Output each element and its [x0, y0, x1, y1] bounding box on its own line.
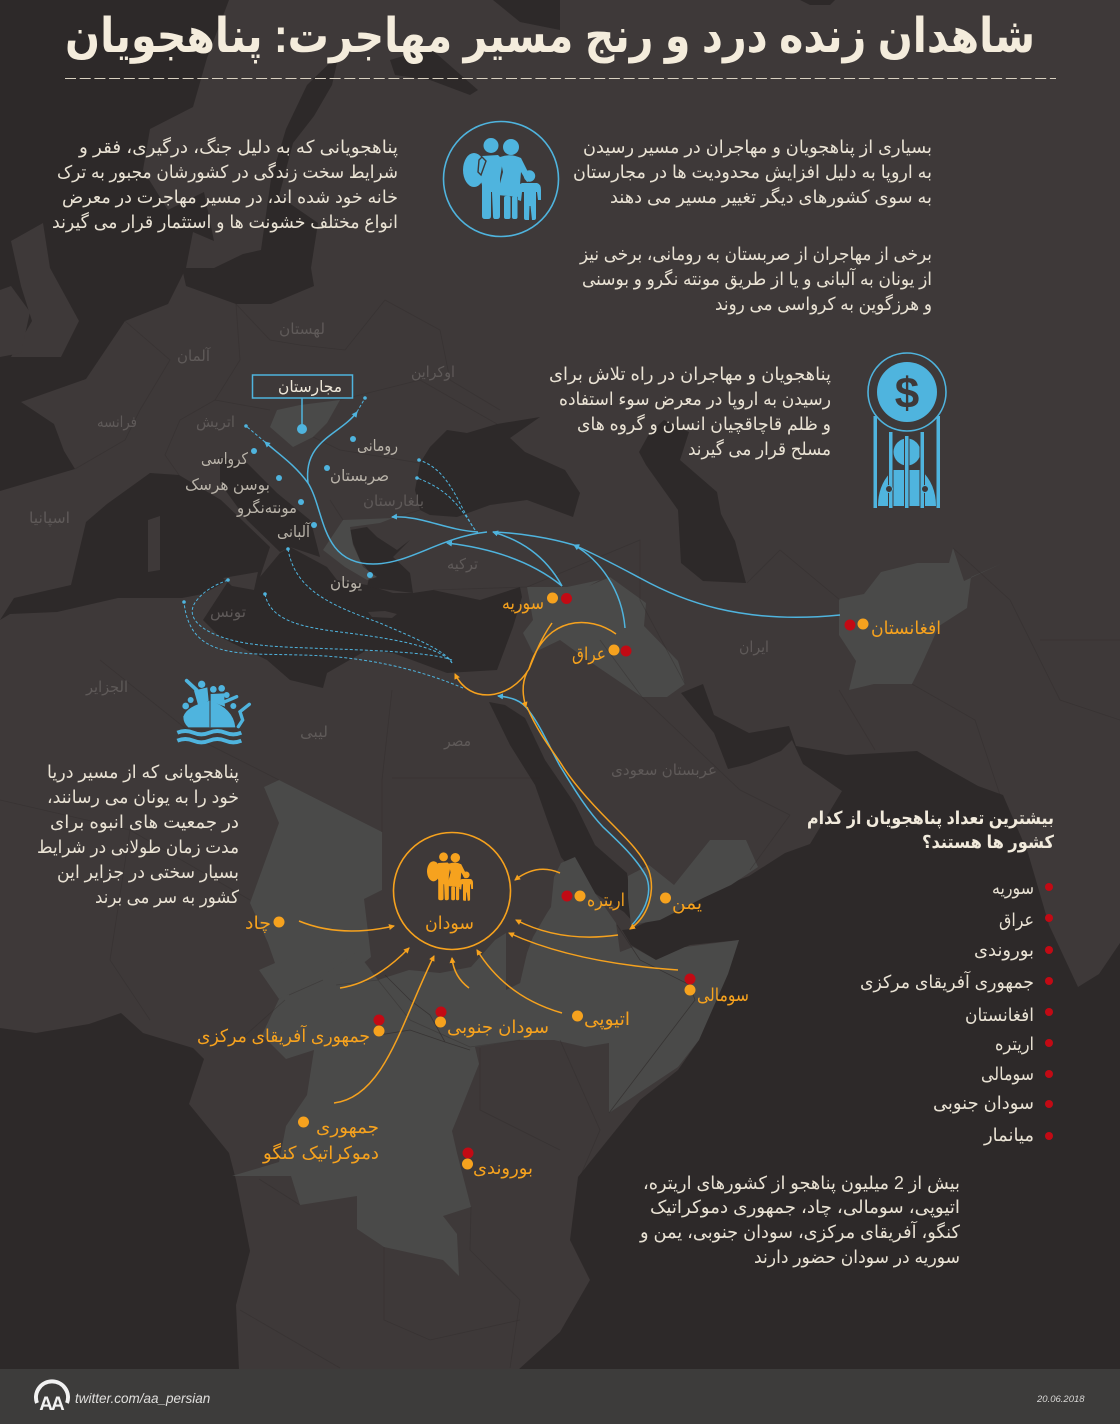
grey country labels: آلمان	[177, 347, 211, 365]
sudan circle with family icon	[394, 832, 510, 950]
text block: greek islands: در جمعیت های انبوه برای	[50, 812, 239, 833]
text block: route change: به سوی کشورهای دیگر تغییر مسیر می دهند	[610, 186, 932, 208]
text block: war and hardship: پناهجویانی که به دلیل جنگ، درگیری، فقر و	[78, 136, 398, 158]
grey country labels: اوکراین	[411, 364, 455, 381]
orange country labels: سومالی	[697, 985, 749, 1006]
date: 20.06.2018	[1036, 1394, 1085, 1405]
balkan route country labels: صربستان	[330, 468, 389, 486]
list: top origin countries: جمهوری آفریقای مرکزی	[860, 970, 1034, 993]
text block: refugees in sudan: کنگو، آفریقای مرکزی، سودان جنوبی، یمن و	[639, 1220, 960, 1243]
orange country labels: جمهوری آفریقای مرکزی	[197, 1024, 370, 1047]
orange country labels: چاد	[245, 913, 271, 933]
icon: money and prison bars: $	[895, 369, 919, 418]
orange country labels: عراق	[572, 644, 606, 665]
hungary callout: مجارستان	[278, 379, 342, 397]
list: top origin countries: میانمار	[983, 1125, 1034, 1145]
land islands	[0, 223, 397, 618]
balkan route country labels: آلبانی	[277, 522, 311, 541]
grey country labels: ایران	[739, 639, 769, 656]
list: top origin countries: سودان جنوبی	[933, 1093, 1034, 1114]
text block: refugees in sudan: اتیوپی، سومالی، چاد، جمهوری دموکراتیک	[650, 1197, 960, 1218]
text block: greek islands: پناهجویانی که از مسیر دریا	[47, 762, 239, 783]
text block: route change: بسیاری از پناهجویان و مهاجران در مسیر رسیدن	[583, 137, 932, 158]
balkan route country labels: مونته‌نگرو	[236, 498, 297, 518]
highlighted countries	[232, 400, 1003, 1276]
heading: top origin countries: کشور ها هستند؟	[922, 832, 1054, 853]
grey country labels: الجزایر	[85, 679, 128, 696]
orange country labels: بوروندی	[473, 1158, 533, 1179]
icon: migrant boat	[177, 681, 249, 742]
sudan dark strip	[506, 937, 527, 985]
blue solid routes	[265, 412, 840, 925]
grey country labels: مصر	[443, 733, 471, 750]
grey country labels: لیبی	[300, 724, 328, 741]
grey country labels: ترکیه	[447, 556, 478, 573]
text block: smugglers: پناهجویان و مهاجران در راه تلاش برای	[549, 364, 831, 385]
balkan route country labels: رومانی	[357, 438, 398, 456]
text block: refugees in sudan: بیش از 2 میلیون پناهجو از کشورهای اریتره،	[643, 1173, 960, 1194]
text block: war and hardship: شرایط سخت زندگی در کشورشان مجبور به ترک	[57, 161, 398, 183]
text block: smugglers	[549, 364, 831, 460]
list: top origin countries: افغانستان	[965, 1005, 1034, 1025]
balkan route country labels: کرواسی	[201, 451, 248, 469]
orange country labels: جمهوری	[316, 1117, 379, 1138]
orange country labels	[197, 593, 941, 1179]
text block: war and hardship	[52, 136, 398, 233]
grey country labels: بلغارستان	[363, 493, 424, 510]
hungary callout	[252, 375, 352, 434]
blue country dots	[251, 436, 373, 578]
grey country labels: تونس	[210, 604, 246, 621]
text block: war and hardship: خانه خود شده اند، در مسیر مهاجرت در معرض	[62, 187, 398, 208]
text block: greek islands: خود را به یونان می رسانند،	[47, 787, 239, 808]
text block: balkan routes: برخی از مهاجران از صربستان به رومانی، برخی نیز	[579, 244, 932, 265]
orange routes toward europe and yemen	[455, 622, 651, 929]
orange routes into sudan	[299, 869, 678, 1103]
text block: greek islands: مدت زمان طولانی در شرایط	[37, 837, 239, 858]
text block: greek islands: کشور به سر می برند	[95, 887, 239, 908]
grey country labels: اتریش	[196, 414, 235, 431]
grey country labels: اسپانیا	[29, 510, 70, 528]
orange country labels: افغانستان	[871, 618, 941, 638]
logo: anadolu agency	[36, 1381, 68, 1415]
text block: refugees in sudan: سوریه در سودان حضور دارند	[754, 1247, 960, 1268]
footer bar	[0, 1369, 1120, 1424]
orange country labels: سوریه	[502, 593, 544, 614]
list: top origin countries: اریتره	[995, 1034, 1034, 1055]
sudan circle with family icon: سودان	[425, 913, 474, 934]
balkan route country labels: یونان	[330, 575, 362, 593]
grey country labels: فرانسه	[97, 414, 137, 431]
list: top origin countries: سومالی	[981, 1064, 1034, 1085]
text block: route change	[573, 137, 932, 208]
footer link: twitter.com/aa_persian	[75, 1391, 210, 1406]
heading: top origin countries	[807, 808, 1054, 853]
text block: smugglers: و ظلم قاچاقچیان انسان و گروه های	[577, 413, 831, 435]
icon: money and prison bars	[868, 353, 946, 508]
blue dashed routes	[182, 396, 475, 688]
list: top origin countries	[860, 878, 1053, 1145]
orange country labels: اریتره	[587, 890, 625, 911]
orange country labels: اتیوپی	[584, 1009, 630, 1030]
list: top origin countries: بوروندی	[974, 940, 1034, 961]
text block: war and hardship: انواع مختلف خشونت ها و استثمار قرار می گیرند	[52, 211, 398, 233]
grey country labels	[29, 321, 769, 779]
grey country labels: عربستان سعودی	[611, 762, 717, 779]
text block: greek islands: بسیار سختی در جزایر این	[57, 862, 239, 883]
text block: balkan routes: از یونان به آلبانی و یا از طریق مونته نگرو و بوسنی	[582, 267, 932, 290]
text block: smugglers: مسلح قرار می گیرند	[688, 438, 831, 460]
orange country labels: یمن	[672, 893, 702, 914]
borders	[0, 300, 1120, 1368]
balkan route country labels: بوسن هرسک	[185, 477, 270, 495]
list: top origin countries: سوریه	[992, 878, 1034, 899]
grey country labels: لهستان	[279, 321, 325, 338]
list: top origin countries: عراق	[999, 910, 1034, 931]
orange country labels: دموکراتیک کنگو	[262, 1142, 379, 1164]
orange country labels: سودان جنوبی	[447, 1017, 549, 1038]
icon: refugee family	[444, 122, 558, 236]
route map: europe routes	[182, 375, 840, 925]
origin country markers	[274, 592, 868, 1170]
text block: smugglers: رسیدن به اروپا در معرض سوء استفاده	[559, 389, 831, 410]
balkan route country labels	[185, 438, 398, 593]
heading: top origin countries: بیشترین تعداد پناهجویان از کدام	[807, 808, 1054, 829]
text block: balkan routes	[579, 244, 932, 315]
text block: balkan routes: و هرزگوین به کرواسی می روند	[715, 293, 932, 315]
text block: refugees in sudan	[639, 1173, 960, 1268]
text block: greek islands	[37, 762, 239, 908]
text block: route change: به اروپا به دلیل افزایش محدودیت ها در مجارستان	[573, 162, 932, 183]
logo: anadolu agency: AA	[39, 1394, 65, 1415]
